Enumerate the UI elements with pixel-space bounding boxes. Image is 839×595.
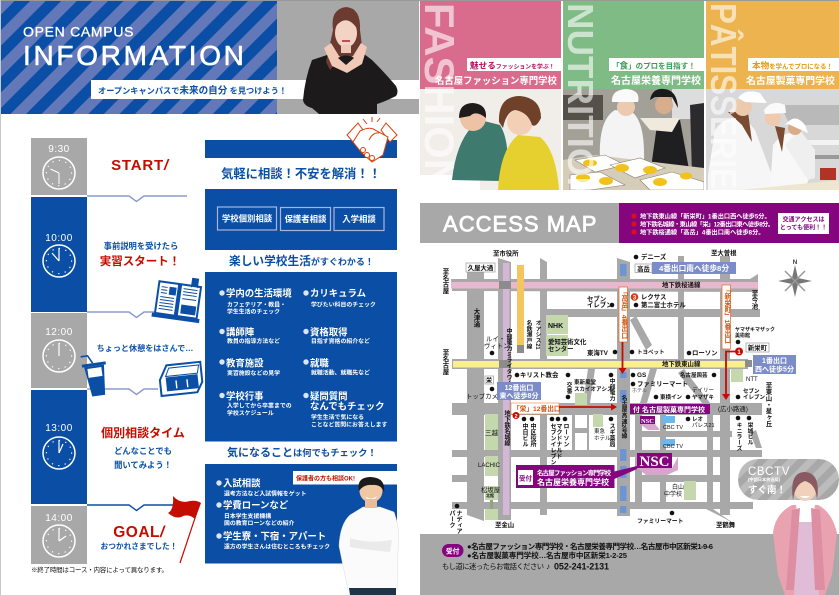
map labels: 中部電力: [608, 377, 615, 403]
item: housing: 学生寮・下宿・アパート: [223, 530, 326, 542]
item: events: 学校スケジュール: [227, 409, 274, 417]
map labels: 至名古屋: [442, 349, 449, 376]
item: campus life: カフェテリア・教員・: [227, 300, 286, 308]
station box: shin-sakaemachi: [746, 343, 769, 352]
map labels: ファミリーマート: [637, 380, 688, 388]
map labels: GS: [637, 372, 647, 379]
label: NSC main building: NSC: [639, 454, 670, 470]
icon: bento box: [158, 362, 203, 396]
item: questions: 疑問質問: [310, 390, 348, 402]
map labels: 至大曽根: [711, 248, 737, 257]
map labels: キニラーズ: [735, 422, 742, 452]
map labels: 栄城ビル: [746, 421, 753, 446]
station box: shin-sakaemachi: 新栄町: [748, 343, 768, 352]
item: instructors: 教員の指導方法など: [227, 337, 280, 345]
header banner: [1, 1, 419, 114]
panel: access directions: 地下鉄東山線「新栄町」1番出口西へ徒歩5分。: [640, 212, 771, 220]
item: qualifications: [310, 326, 370, 345]
item: employment: 就職活動、就職先など: [311, 368, 370, 376]
item: employment: [310, 358, 370, 376]
item: instructors: 講師陣: [226, 326, 255, 338]
subway: meijo line: [503, 263, 510, 515]
panel: consultation top bar: [205, 140, 397, 158]
station box: hisaya-odori: [466, 263, 495, 272]
green buildings: [485, 315, 743, 520]
phone line: ♪: [546, 562, 550, 571]
map labels: 東横イン: [660, 393, 683, 401]
item: housing: [223, 530, 330, 550]
map labels: 第二富士ホテル: [641, 300, 686, 309]
item: tuition loans: 国の教育ローンなどの紹介: [224, 519, 295, 527]
tagline: [467, 58, 561, 71]
photo: woman in pink jacket: [773, 472, 837, 595]
map labels: セブンイレブン: [549, 423, 556, 465]
subway: higashiyama line: [453, 361, 745, 368]
tagline strip: オープンキャンパスで未来の自分 を見つけよう！: [98, 84, 287, 96]
panel: school life list: [205, 272, 397, 442]
vertical title: FASHION: [416, 3, 463, 189]
map labels: 松坂屋: [481, 485, 501, 494]
item: qualifications: 資格取得: [310, 326, 348, 338]
tagline strip: [91, 80, 419, 99]
phone line: 052-241-2131: [554, 562, 609, 572]
callout: CBCTV: (中部日本放送局): [748, 476, 781, 483]
step: practice start: 実習スタート！: [100, 254, 180, 268]
address lines: ●名古屋ファッション専門学校・名古屋栄養専門学校…名古屋市中区新栄1-9-6: [467, 541, 713, 551]
photo: nutrition students: [563, 89, 704, 190]
item: facilities: 教育施設: [226, 358, 264, 368]
map labels: ホテル: [594, 435, 611, 442]
route: sakae exit 12: [511, 403, 617, 420]
map labels: 中部電力ミライタワー: [505, 327, 512, 386]
button: guardian consultation: 保護者相談: [285, 214, 327, 224]
tagline: 魅せるファッションを学ぶ！: [470, 60, 555, 70]
route: shin-sakaemachi exit 1: [722, 285, 743, 400]
header small title: OPEN CAMPUS: [23, 24, 134, 40]
time block 12:00: 12:00: [45, 327, 73, 338]
item: facilities: [226, 358, 280, 377]
map labels: ルイ・: [486, 336, 505, 343]
item: questions: なんでもチェック: [310, 400, 385, 412]
map labels: スギ薬局: [608, 423, 615, 448]
note: convenient access: とっても便利！！: [780, 224, 827, 232]
photo: patisserie students: [706, 89, 839, 190]
item: events: 入学してから卒業までの: [227, 402, 292, 410]
item: campus life: 学内の生活環境: [226, 288, 292, 298]
map labels: 三越: [485, 428, 498, 437]
map labels: NTT: [746, 377, 758, 383]
callout: exit 12: [497, 382, 541, 400]
label: reception school box: [516, 465, 637, 488]
step: goal: おつかれさまでした！: [101, 541, 177, 551]
station box: takaoka: [635, 264, 652, 273]
item: questions: [310, 390, 388, 428]
panel: fashion school: [416, 1, 561, 190]
timeline: [31, 138, 205, 574]
map labels: デイリー: [692, 386, 714, 394]
tagline: 本物を学んでプロになる！: [752, 60, 833, 70]
item: curriculum: カリキュラム: [310, 288, 366, 298]
map labels: ヴィトン: [484, 341, 510, 350]
label: reception school box: 受付: [519, 474, 532, 482]
map labels: CBC TV: [663, 425, 683, 431]
item: events: [226, 390, 292, 417]
map labels: 大津通: [472, 307, 480, 328]
label: patisserie school reception: [630, 404, 710, 430]
panel: access map title: [420, 203, 619, 243]
callout: CBCTV: CBCTV: [748, 466, 790, 478]
photo: woman making heart hands: [303, 7, 398, 114]
tagline: 「食」のプロを目指す！: [612, 60, 696, 70]
note: convenient access: 交通アクセスは: [782, 216, 825, 224]
time block 13:00: 13:00: [45, 423, 73, 434]
button: school consultation: [218, 207, 276, 230]
item: curriculum: [310, 288, 376, 308]
map labels: セブン: [743, 387, 760, 395]
label: reception school box: 名古屋栄養専門学校: [537, 477, 609, 487]
map labels: センター: [548, 344, 574, 353]
map labels: 中区役所: [529, 422, 536, 448]
icon: goal flag: [168, 496, 201, 563]
map labels: 地下鉄東山線: [662, 359, 701, 368]
callout: exit 1: 西へ徒歩5分: [755, 364, 794, 374]
time block 10:00: [31, 197, 87, 312]
photo: fashion students: [420, 89, 561, 190]
header main title: INFORMATION: [23, 40, 245, 71]
label: patisserie school reception: NSC: [641, 418, 654, 425]
connector lines: [87, 196, 187, 510]
callout: exit 4: 4番出口南へ徒歩8分: [659, 263, 729, 273]
note: convenient access: [778, 213, 829, 234]
panel: access directions: 地下鉄名城線・東山線「栄」12番出口東へ徒歩8分。: [640, 220, 774, 228]
item: employment: 就職: [310, 358, 329, 368]
button: guardian consultation: [280, 208, 330, 230]
map labels: 至鶴舞: [716, 520, 736, 529]
map labels: 名鉄瀬戸線: [525, 319, 532, 350]
panel: consultation types: [205, 189, 397, 250]
badge: guardians welcome: [293, 471, 397, 484]
map labels: キリスト教会: [520, 370, 559, 379]
step: individual consultation: [101, 425, 185, 470]
compass: N: [793, 259, 798, 266]
badge: reception: [442, 544, 464, 557]
map labels: 至名古屋: [442, 268, 449, 295]
footnote: ※終了時間はコース・内容によって異なります。: [31, 565, 168, 574]
panel: footer address: ●名古屋製菓専門学校…名古屋市中区新栄1-2-25: [467, 550, 628, 560]
map labels: イレブン: [587, 300, 613, 309]
map labels: [442, 248, 775, 534]
time block 13:00: [31, 390, 87, 504]
item: entrance exam: 選考方法など入試情報をゲット: [224, 490, 307, 498]
icon: handshake: [347, 117, 397, 162]
time block 12:00: [31, 313, 87, 388]
item: events: 学校行事: [226, 390, 264, 402]
map location dots: [455, 255, 751, 515]
callout: exit 4: [652, 262, 736, 274]
item: tuition loans: 学費ローンなど: [223, 500, 289, 510]
station box: takaoka: 高岳: [637, 264, 650, 273]
time block 10:00: 10:00: [45, 233, 73, 244]
panel: access directions: 地下鉄桜通線「高岳」4番出口南へ徒歩8分。: [640, 228, 764, 236]
route: takaoka exit 4: 「高岳」4番出口: [620, 288, 628, 339]
button: admission consultation: 入学相談: [342, 214, 376, 224]
phone line: もし道に迷ったらお電話ください: [442, 562, 544, 571]
map labels: 東新風堂: [574, 378, 597, 386]
item: entrance exam: 入試相談: [223, 478, 261, 488]
item: tuition loans: [223, 500, 295, 527]
callout: CBCTV: [738, 459, 839, 500]
map labels: 至今池: [750, 290, 758, 309]
blue expressway: [620, 264, 626, 513]
callout: CBCTV: すぐ南！: [748, 484, 786, 496]
vertical title: NUTRITION: [560, 3, 601, 203]
map labels: 至金山: [495, 520, 514, 529]
badge: guardians welcome: 保護者の方も相談OK!: [296, 474, 355, 482]
orange meitetsu line: [517, 265, 524, 345]
heading: consultation: 気軽に相談！不安を解消！！: [221, 166, 381, 181]
step: practice start: 事前説明を受けたら: [104, 241, 178, 251]
panel: nutrition school: [560, 1, 704, 203]
map labels: 名古屋国芸: [680, 371, 708, 379]
map labels: スカイオアシス: [574, 386, 613, 393]
label: NSC main building: [637, 453, 678, 475]
panel: patisserie school: [703, 1, 839, 190]
route: shin-sakaemachi exit 1: 「新栄町」1番出口: [723, 286, 731, 344]
map labels: マクドナルド: [555, 423, 562, 459]
map labels: トップカメラ: [466, 392, 504, 400]
item: instructors: [226, 326, 280, 345]
time block 14:00: 14:00: [45, 513, 73, 524]
map labels: パレス21: [692, 422, 715, 429]
tagline: [748, 58, 839, 71]
map labels: 中日ビル: [521, 422, 528, 447]
route: shin-sakaemachi exit 1: 1: [737, 350, 741, 356]
map labels: 地下鉄桜通線: [662, 280, 701, 289]
map labels: デニーズ: [641, 252, 667, 261]
step: practice start: [100, 241, 180, 268]
map labels: ナディア: [455, 510, 462, 534]
icon: open book: [151, 273, 205, 323]
map labels: 中学校: [664, 490, 682, 498]
map labels: LACHIC: [478, 463, 501, 469]
step: individual consultation: 個別相談タイム: [101, 425, 185, 440]
map labels: オアシス21: [534, 320, 541, 350]
marker: takaoka 3: 3: [633, 296, 637, 302]
panel: footer address: [420, 534, 839, 595]
map labels: 地下鉄名城線: [503, 409, 510, 447]
item: qualifications: 目指す資格の紹介など: [311, 337, 370, 345]
map labels: 東海TV: [587, 348, 609, 357]
photo: man with crossed arms: [339, 477, 399, 595]
icon: drink cup: [81, 353, 110, 397]
map labels: レオ: [692, 416, 703, 423]
roads: [451, 256, 762, 525]
phone line: [442, 562, 609, 572]
map labels: ローソン: [692, 349, 718, 357]
light blue CBC buildings: [662, 416, 675, 423]
item: tuition loans: 日本学生支援機構: [224, 512, 271, 520]
subway: sakura-dori line: [451, 282, 758, 288]
panel: access map title: ACCESS MAP: [443, 212, 597, 236]
badge: reception: 受付: [446, 546, 460, 556]
map labels: 白山: [672, 483, 684, 491]
item: campus life: 学生生活のチェック: [227, 308, 280, 316]
step: goal: GOAL/: [113, 524, 166, 541]
map labels: 東急: [594, 427, 606, 435]
map labels: ヤマザキ: [692, 393, 714, 401]
button: school consultation: 学校個別相談: [222, 214, 273, 224]
map labels: 至市役所: [493, 248, 519, 258]
panel: admission list: [205, 464, 397, 564]
compass: [778, 259, 812, 297]
map labels: トヨペット: [637, 349, 665, 356]
station box: sakae: [485, 376, 494, 384]
vertical title: PÂTISSERIE: [703, 3, 745, 189]
label: reception school box: 名古屋ファッション専門学校: [537, 468, 612, 477]
map labels: 北館: [486, 492, 494, 498]
map labels: CBC TV: [663, 444, 683, 450]
callout: exit 1: [753, 355, 796, 374]
time block 9:30: [31, 138, 87, 195]
map labels: (広小路通): [718, 404, 748, 413]
time block 14:00: [31, 506, 87, 564]
route: sakae exit 12: 2: [514, 414, 518, 420]
step: individual consultation: 聞いてみよう！: [114, 460, 172, 470]
map labels: ローソン: [562, 423, 569, 447]
step: start: START/: [111, 157, 170, 174]
school name: 名古屋製菓専門学校: [746, 74, 835, 87]
map labels: ヤマザキマザック: [735, 326, 775, 333]
label: patisserie school reception: 付 名古屋製菓専門学校: [633, 405, 705, 414]
access map: [442, 248, 812, 534]
heading: school life: 楽しい学校生活がすぐわかる！: [229, 254, 374, 268]
step: break: ちょっと休憩をはさんで…: [97, 343, 193, 353]
item: campus life: [226, 288, 292, 316]
callout: exit 12: 東へ徒歩8分: [500, 391, 538, 400]
callout: exit 1: 1番出口: [762, 356, 787, 365]
school name: 名古屋ファッション専門学校: [435, 75, 558, 86]
item: curriculum: 学びたい科目のチェック: [311, 300, 376, 308]
map labels: ホテル: [632, 388, 647, 394]
button: admission consultation: [334, 208, 384, 230]
map labels: 名古屋高速2号線: [620, 394, 627, 440]
map labels: パーク: [448, 510, 455, 529]
marker: takaoka 3: [631, 293, 638, 302]
step: individual consultation: どんなことでも: [114, 446, 172, 456]
station box: hisaya-odori: 久屋大通: [468, 263, 494, 272]
school name: 名古屋栄養専門学校: [611, 74, 701, 87]
item: facilities: 実習施設などの見学: [227, 369, 280, 377]
map labels: ファミリーマート: [637, 518, 684, 525]
route: sakae exit 12: 「栄」12番出口: [513, 404, 561, 413]
station box: sakae: 栄: [486, 376, 492, 384]
route: takaoka exit 4: [618, 287, 628, 374]
map labels: 至東山・星ヶ丘: [764, 382, 772, 427]
map labels: セブン: [587, 294, 607, 303]
map labels: イレブン: [743, 393, 766, 401]
map labels: 美術館: [735, 332, 750, 339]
time block 9:30: 9:30: [48, 144, 70, 155]
item: questions: ことなど質問にお答えします: [311, 420, 388, 428]
panel: access directions: [619, 203, 839, 243]
item: questions: 学生生活で気になる: [311, 413, 364, 421]
item: entrance exam: [223, 478, 307, 498]
map labels: レクサス: [641, 292, 666, 301]
step: goal: [101, 524, 177, 551]
map labels: NHK: [548, 323, 563, 330]
tagline: [609, 58, 704, 71]
map labels: 愛知芸術文化: [548, 337, 587, 346]
item: housing: 遠方の学生さんは住むところもチェック: [224, 542, 330, 550]
callout: exit 12: 12番出口: [505, 383, 533, 392]
heading: check anything: 気になることは何でもチェック！: [227, 445, 377, 459]
map labels: 交番: [565, 382, 572, 395]
